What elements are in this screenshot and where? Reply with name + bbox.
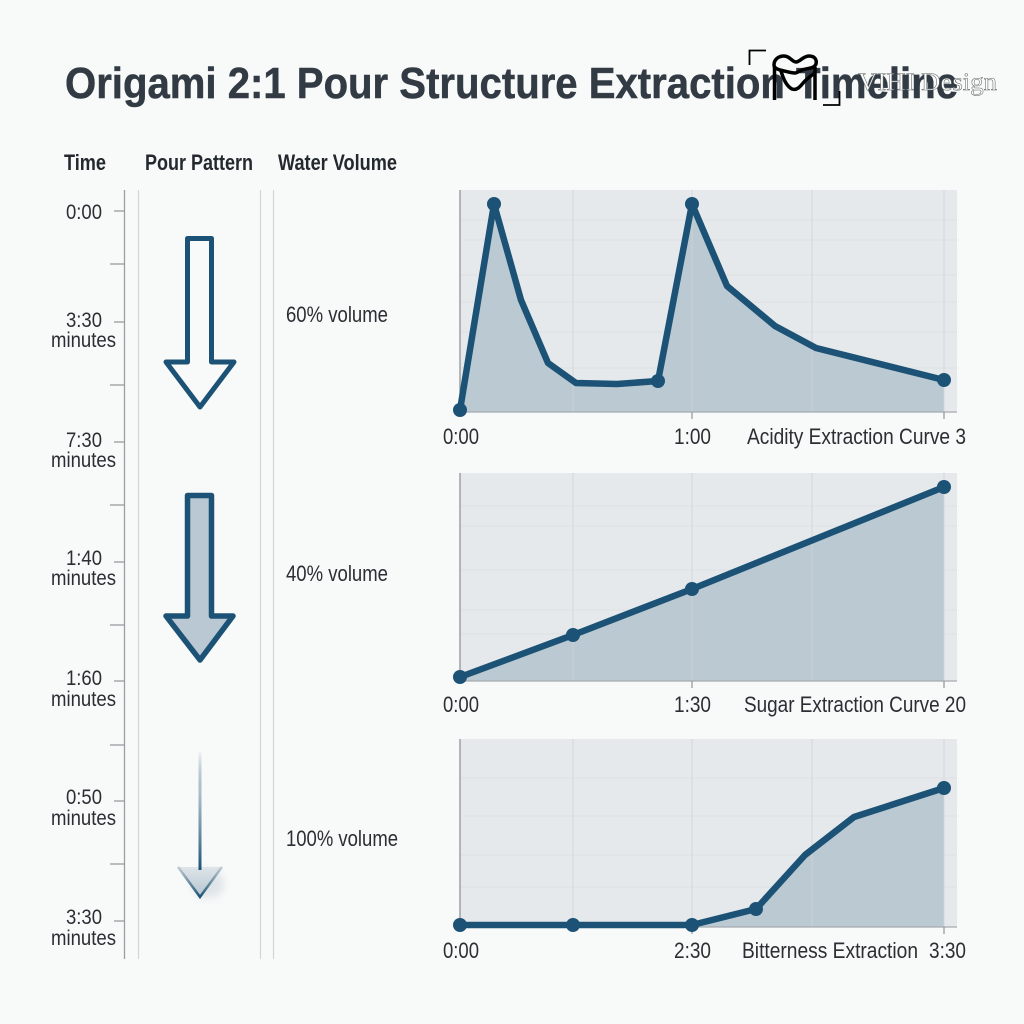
chart: bitterness extraction curve: 0:00 bbox=[443, 938, 479, 963]
time axis labels: 1:40 bbox=[66, 547, 102, 570]
time axis labels: minutes bbox=[51, 329, 116, 352]
chart: acidity extraction curve: Acidity Extraction Curve 3 bbox=[747, 424, 966, 449]
column headings bbox=[64, 150, 397, 175]
column headings: Water Volume bbox=[278, 150, 397, 175]
time axis labels: 1:60 bbox=[66, 667, 102, 690]
chart: bitterness extraction curve bbox=[443, 739, 966, 963]
chart: sugar extraction curve: Sugar Extraction Curve 20 bbox=[744, 692, 966, 717]
time axis labels: minutes bbox=[51, 688, 116, 711]
chart: acidity extraction curve: 0:00 bbox=[443, 424, 479, 449]
title: Origami 2:1 Pour Structure Extraction Timeline bbox=[65, 59, 958, 108]
chart: sugar extraction curve: 1:30 bbox=[674, 692, 711, 717]
time axis ticks bbox=[110, 211, 124, 921]
arrow: filled pour 2 bbox=[166, 496, 233, 660]
chart: sugar extraction curve: 0:00 bbox=[443, 692, 479, 717]
chart: sugar extraction curve bbox=[443, 473, 966, 717]
chart: acidity extraction curve bbox=[443, 190, 966, 449]
time axis labels: 3:30 bbox=[66, 906, 102, 929]
time axis labels: 0:50 bbox=[66, 786, 102, 809]
time axis labels: minutes bbox=[51, 567, 116, 590]
logo mark bbox=[750, 50, 840, 105]
column headings: Pour Pattern bbox=[145, 150, 253, 175]
time axis labels: 0:00 bbox=[66, 201, 102, 224]
arrow: fading pour 3 bbox=[178, 750, 224, 898]
time axis labels: 3:30 bbox=[66, 309, 102, 332]
volume labels: 40% volume bbox=[286, 561, 388, 586]
chart: bitterness extraction curve: 3:30 bbox=[929, 938, 966, 963]
column divider lines bbox=[124, 190, 274, 959]
time axis labels: minutes bbox=[51, 927, 116, 950]
arrow: outlined pour 1 bbox=[166, 238, 234, 407]
chart: bitterness extraction curve: 2:30 bbox=[674, 938, 711, 963]
time axis labels: 7:30 bbox=[66, 429, 102, 452]
column headings: Time bbox=[64, 150, 106, 175]
volume labels: 100% volume bbox=[286, 826, 398, 851]
volume labels: 60% volume bbox=[286, 302, 388, 327]
chart: acidity extraction curve: 1:00 bbox=[674, 424, 711, 449]
volume labels bbox=[286, 302, 398, 851]
time axis labels bbox=[51, 201, 116, 950]
time axis labels: minutes bbox=[51, 449, 116, 472]
chart: bitterness extraction curve: Bitterness Extraction bbox=[742, 938, 918, 963]
watermark: VIHI Design: VIHI Design bbox=[858, 69, 998, 96]
time axis labels: minutes bbox=[51, 807, 116, 830]
